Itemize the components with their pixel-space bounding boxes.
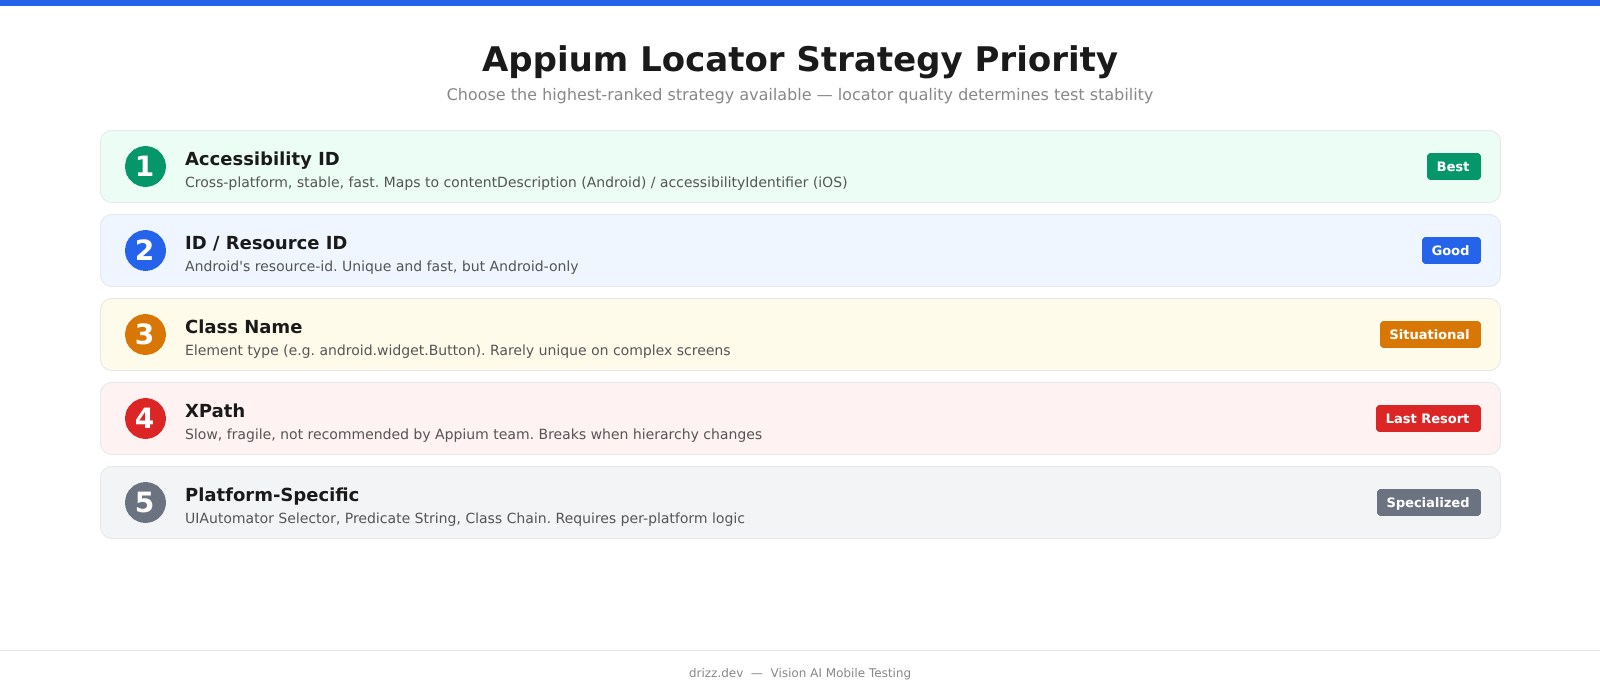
heading: ID / Resource ID: ID / Resource ID: [185, 233, 347, 254]
badge: Specialized: Specialized: [1386, 496, 1470, 511]
panel: rank 5 Platform-Specific: [100, 466, 1501, 539]
icon: rank number 1: 1: [135, 150, 154, 183]
heading: Class Name: Class Name: [185, 317, 302, 338]
description: Platform-Specific: UIAutomator Selector, Predicate String, Class Chain. Requires per-platform logic: [185, 511, 745, 527]
badge: Situational: [1380, 321, 1481, 348]
badge: Specialized: [1377, 489, 1481, 516]
description: ID / Resource ID: Android's resource-id. Unique and fast, but Android-only: [185, 259, 579, 275]
top accent bar: [0, 0, 1600, 6]
description: Class Name: Element type (e.g. android.widget.Button). Rarely unique on complex screens: [185, 343, 731, 359]
badge: Best: [1427, 153, 1481, 180]
footer rule: [0, 650, 1600, 651]
description: Accessibility ID: Cross-platform, stable, fast. Maps to contentDescription (Android) / accessibilityIdentifier (iOS): [185, 175, 848, 191]
footer text: drizz.dev — Vision AI Mobile Testing: [689, 666, 911, 680]
icon: rank number 3: 3: [135, 318, 154, 351]
icon: rank number 5: 5: [135, 486, 154, 519]
badge: Best: Best: [1437, 160, 1469, 175]
icon: rank number 4: 4: [135, 402, 154, 435]
subtitle: Choose the highest-ranked strategy available — locator quality determines test stability: [447, 85, 1153, 104]
badge: Last Resort: [1376, 405, 1481, 432]
badge: Situational: Situational: [1389, 328, 1470, 343]
panel: rank 3 Class Name: [100, 298, 1501, 371]
icon: rank number 3: [125, 314, 166, 355]
badge: Last Resort: Last Resort: [1386, 412, 1469, 427]
heading: Accessibility ID: Accessibility ID: [185, 149, 340, 170]
icon: rank number 1: [125, 146, 166, 187]
title: Appium Locator Strategy Priority: [482, 40, 1118, 80]
icon: rank number 2: 2: [135, 234, 154, 267]
panel: rank 1 Accessibility ID: [100, 130, 1501, 203]
icon: rank number 5: [125, 482, 166, 523]
badge: Good: Good: [1432, 244, 1469, 259]
icon: rank number 2: [125, 230, 166, 271]
description: XPath: Slow, fragile, not recommended by Appium team. Breaks when hierarchy changes: [185, 427, 762, 443]
badge: Good: [1422, 237, 1481, 264]
heading: Platform-Specific: Platform-Specific: [185, 485, 359, 506]
panel: rank 2 ID / Resource ID: [100, 214, 1501, 287]
panel: rank 4 XPath: [100, 382, 1501, 455]
icon: rank number 4: [125, 398, 166, 439]
heading: XPath: XPath: [185, 401, 245, 422]
